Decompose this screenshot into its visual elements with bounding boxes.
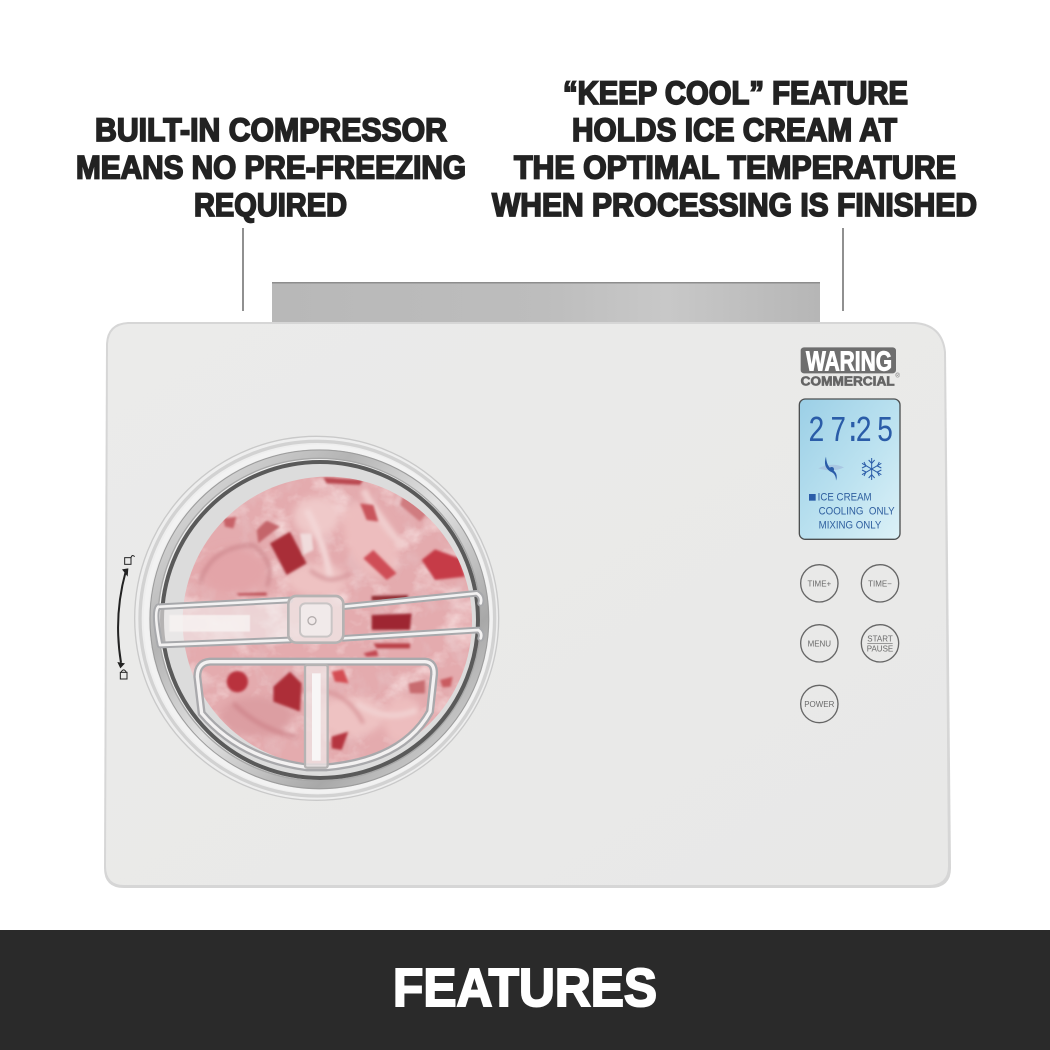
transparent outer lid rim [135, 436, 499, 800]
Waring Commercial logo: ® [895, 372, 900, 379]
button: time plus: TIME+ [807, 579, 832, 588]
button: power: POWER [804, 700, 835, 709]
leader line: keep cool [842, 228, 844, 311]
callout: built-in compressor: REQUIRED [194, 187, 347, 223]
machine body [104, 322, 951, 888]
button: start pause [861, 625, 899, 662]
mode list [809, 492, 895, 532]
clear lid handle [156, 593, 481, 647]
control panel [799, 345, 900, 723]
callout: built-in compressor: MEANS NO PRE-FREEZING [76, 150, 466, 186]
callout: built-in compressor: BUILT-IN COMPRESSOR [95, 112, 447, 148]
ice cream bowl [135, 436, 499, 800]
icon: mixing paddle [818, 457, 844, 481]
Waring Commercial logo: COMMERCIAL [801, 374, 895, 388]
timer readout: 27:25 [808, 411, 893, 452]
metal bowl ring [150, 450, 489, 789]
footer banner [0, 930, 1050, 1050]
callout: keep cool feature: THE OPTIMAL TEMPERATURE [514, 150, 956, 186]
icon: lock and unlock arrow [117, 556, 135, 679]
callout: keep cool feature [492, 75, 977, 223]
button: time plus [801, 565, 838, 602]
button: menu [801, 625, 838, 662]
button: time minus: TIME− [868, 579, 892, 588]
button: start pause: PAUSE [867, 645, 893, 654]
callout: keep cool feature: HOLDS ICE CREAM AT [572, 112, 897, 148]
button: power [801, 685, 838, 723]
mode list: ICE CREAM [818, 492, 872, 504]
callout: built-in compressor [76, 112, 466, 223]
footer heading: FEATURES [393, 958, 657, 1018]
Waring Commercial logo [801, 345, 900, 388]
callout: keep cool feature: “KEEP COOL” FEATURE [563, 75, 908, 111]
button: start pause: START [867, 634, 893, 643]
machine rear lid [272, 282, 820, 324]
mode list: MIXING ONLY [819, 520, 881, 532]
icon: snowflake [862, 458, 881, 480]
callout: keep cool feature: WHEN PROCESSING IS FINISHED [492, 187, 977, 223]
leader line: compressor [242, 228, 244, 311]
mode list: COOLING ONLY [819, 506, 895, 518]
clear lid lower window [197, 662, 434, 768]
strawberry ice cream [180, 473, 477, 770]
Waring Commercial logo: WARING [806, 345, 892, 376]
button: menu: MENU [808, 639, 831, 648]
LCD screen [799, 399, 900, 539]
button: time minus [861, 565, 899, 602]
